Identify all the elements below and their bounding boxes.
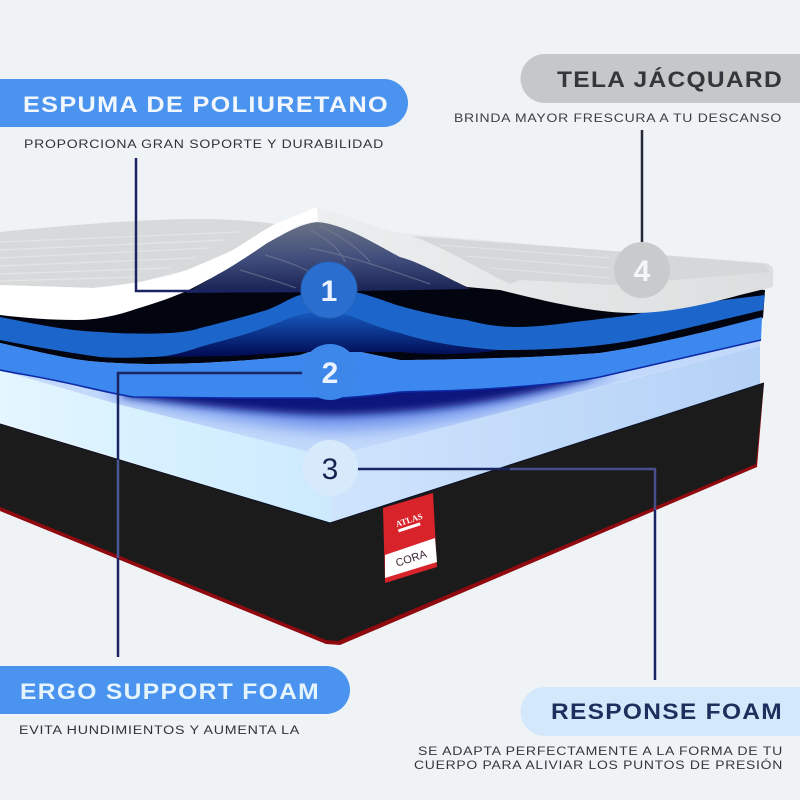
heading text: ESPUMA DE POLIURETANO <box>23 92 389 117</box>
callout: response foam <box>414 687 800 772</box>
surface stripes <box>440 245 610 278</box>
layer 4: white front edge, left <box>0 207 318 320</box>
marker 2: 2 <box>322 357 338 390</box>
heading text: RESPONSE FOAM <box>551 699 783 724</box>
heading text: ERGO SUPPORT FOAM <box>20 679 320 704</box>
layer 4: right side of the sheet <box>317 207 773 313</box>
marker 4: 4 <box>634 255 651 288</box>
callout: tela jacquard <box>454 54 800 125</box>
marker 2 <box>302 344 358 400</box>
mattress illustration <box>0 207 773 645</box>
heading pill <box>520 54 800 103</box>
description: PROPORCIONA GRAN SOPORTE Y DURABILIDAD <box>24 139 384 151</box>
label: red brand tag <box>383 493 437 583</box>
leader line 4 <box>641 130 643 242</box>
leader line 1 <box>136 158 305 291</box>
jacquard surface, right <box>412 236 770 285</box>
label: red brand tag: CORA <box>394 548 429 570</box>
label: red brand tag: ATLAS <box>394 511 424 529</box>
description line 1: SE ADAPTA PERFECTAMENTE A LA FORMA DE TU <box>418 746 783 758</box>
heading pill <box>520 687 800 736</box>
heading pill <box>0 79 408 127</box>
marker 3: 3 <box>322 453 338 486</box>
callout: espuma de poliuretano <box>0 79 408 151</box>
layer 1: dark underside <box>150 313 500 357</box>
leader line 2 <box>118 373 305 657</box>
layer 2: blue foam <box>0 317 762 398</box>
description: EVITA HUNDIMIENTOS Y AUMENTA LA <box>19 725 300 737</box>
layer 4: underside shadow <box>186 222 470 293</box>
heading text: TELA JÁCQUARD <box>557 67 783 92</box>
marker 3 <box>302 440 358 496</box>
layer 4: jacquard top surface, left <box>0 219 275 288</box>
heading pill <box>0 666 350 714</box>
layer: black base with red trim <box>0 383 764 645</box>
description line 2: CUERPO PARA ALIVIAR LOS PUNTOS DE PRESIÓN <box>414 759 783 772</box>
marker 1 <box>301 262 357 318</box>
leader line 3 <box>355 469 655 680</box>
callout: ergo support foam <box>0 666 350 737</box>
marker 1: 1 <box>321 275 337 308</box>
marker 4 <box>614 242 670 298</box>
description: BRINDA MAYOR FRESCURA A TU DESCANSO <box>454 113 782 125</box>
layer 1: blue foam strip <box>0 290 765 358</box>
layer 3: light foam <box>0 335 764 523</box>
dark gap behind foam layers <box>0 270 765 364</box>
